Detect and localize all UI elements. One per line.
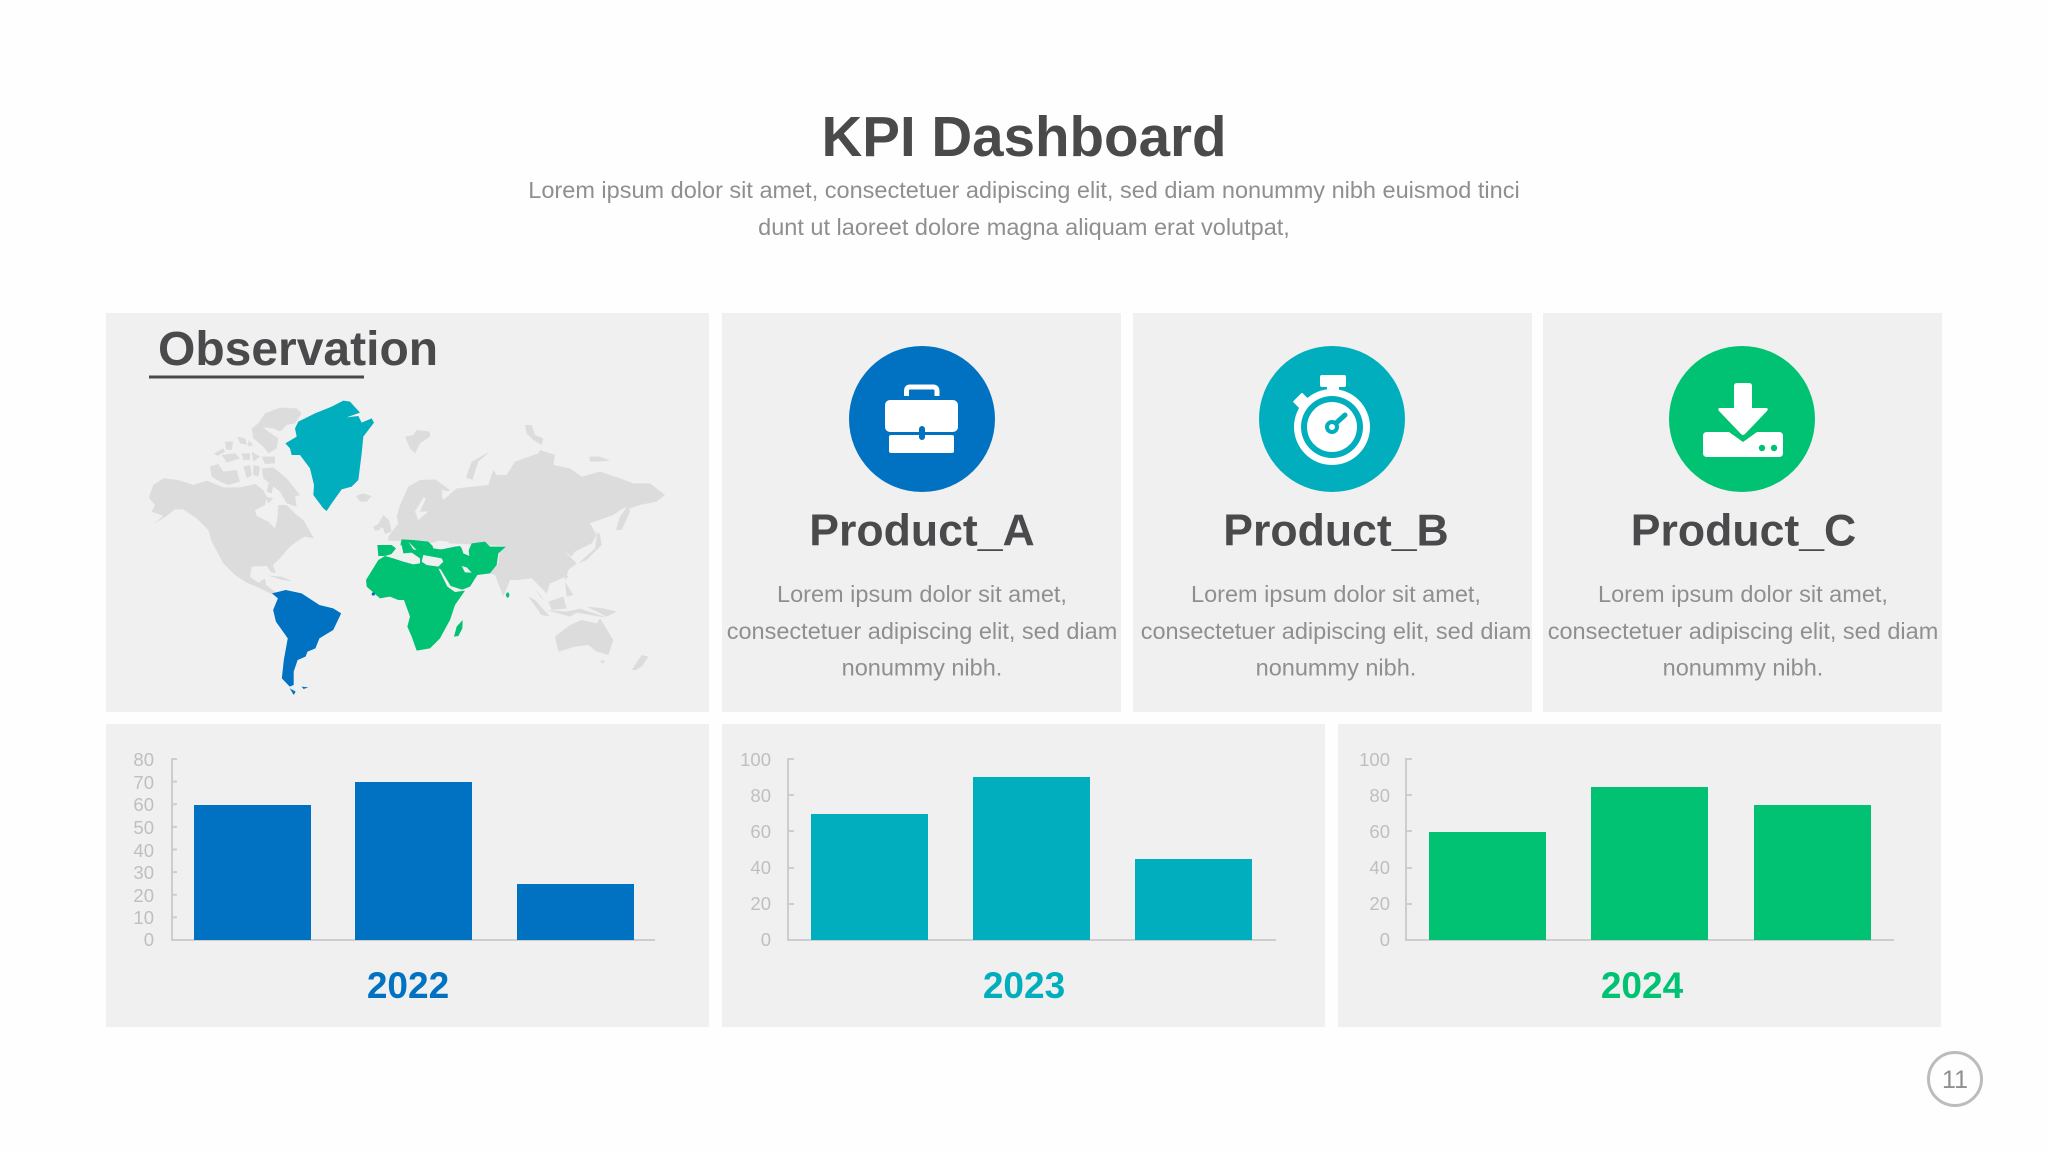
bar chart: 2023: 0 <box>761 929 771 950</box>
year label: 2023 <box>983 965 1065 1006</box>
description: nonummy nibh. <box>842 654 1002 680</box>
panel: 2022 chart <box>106 724 709 1027</box>
product name: Product_B <box>1223 506 1449 556</box>
bar chart: 2023: 100 <box>740 749 771 770</box>
bar chart: 2022: 70 <box>133 772 154 793</box>
description <box>727 581 1117 680</box>
heading: observation: Observation <box>158 323 438 376</box>
world map <box>149 401 665 695</box>
page number <box>1928 1052 1982 1106</box>
panel: 2023 chart <box>722 724 1325 1027</box>
subtitle <box>528 177 1520 240</box>
panel: product C <box>1543 313 1942 712</box>
description: Lorem ipsum dolor sit amet, <box>777 581 1067 607</box>
bar chart: 2022: 0 <box>144 929 154 950</box>
description <box>1548 581 1938 680</box>
page number: 11 <box>1942 1066 1968 1094</box>
description <box>1141 581 1531 680</box>
icon: briefcase <box>849 346 995 492</box>
bar chart: 2022: 20 <box>133 885 154 906</box>
bar chart: 2022 <box>133 749 655 950</box>
bar chart: 2023: 20 <box>750 893 771 914</box>
bar chart: 2024 <box>1359 749 1894 950</box>
icon: stopwatch <box>1259 346 1405 492</box>
icon: download <box>1669 346 1815 492</box>
product name: Product_C <box>1631 506 1856 556</box>
heading underline <box>149 376 364 378</box>
bar chart: 2023: 60 <box>750 821 771 842</box>
bar chart: 2024: 80 <box>1369 785 1390 806</box>
description: consectetuer adipiscing elit, sed diam <box>1548 618 1938 644</box>
bar chart: 2022: 40 <box>133 840 154 861</box>
product name: Product_A <box>809 506 1035 556</box>
year label: 2022 <box>367 965 449 1006</box>
description: consectetuer adipiscing elit, sed diam <box>727 618 1117 644</box>
subtitle: dunt ut laoreet dolore magna aliquam erat volutpat, <box>758 214 1290 240</box>
panel: 2024 chart <box>1338 724 1941 1027</box>
bar chart: 2024: 40 <box>1369 857 1390 878</box>
bar chart: 2024: 60 <box>1369 821 1390 842</box>
panel: product A <box>722 313 1121 712</box>
bar chart: 2024: 100 <box>1359 749 1390 770</box>
bar chart: 2024: 20 <box>1369 893 1390 914</box>
bar chart: 2022: 50 <box>133 817 154 838</box>
description: Lorem ipsum dolor sit amet, <box>1598 581 1888 607</box>
bar chart: 2022: 10 <box>133 907 154 928</box>
description: nonummy nibh. <box>1663 654 1823 680</box>
title: KPI Dashboard <box>822 105 1226 168</box>
description: nonummy nibh. <box>1256 654 1416 680</box>
bar chart: 2024: 0 <box>1380 929 1390 950</box>
description: consectetuer adipiscing elit, sed diam <box>1141 618 1531 644</box>
subtitle: Lorem ipsum dolor sit amet, consectetuer adipiscing elit, sed diam nonummy nibh euismod tinci <box>528 177 1520 203</box>
panel: observation <box>106 313 709 712</box>
bar chart: 2022: 60 <box>133 794 154 815</box>
year label: 2024 <box>1601 965 1684 1006</box>
bar chart: 2023: 80 <box>750 785 771 806</box>
bar chart: 2023: 40 <box>750 857 771 878</box>
bar chart: 2022: 30 <box>133 862 154 883</box>
panel: product B <box>1133 313 1532 712</box>
bar chart: 2022: 80 <box>133 749 154 770</box>
description: Lorem ipsum dolor sit amet, <box>1191 581 1481 607</box>
bar chart: 2023 <box>740 749 1276 950</box>
